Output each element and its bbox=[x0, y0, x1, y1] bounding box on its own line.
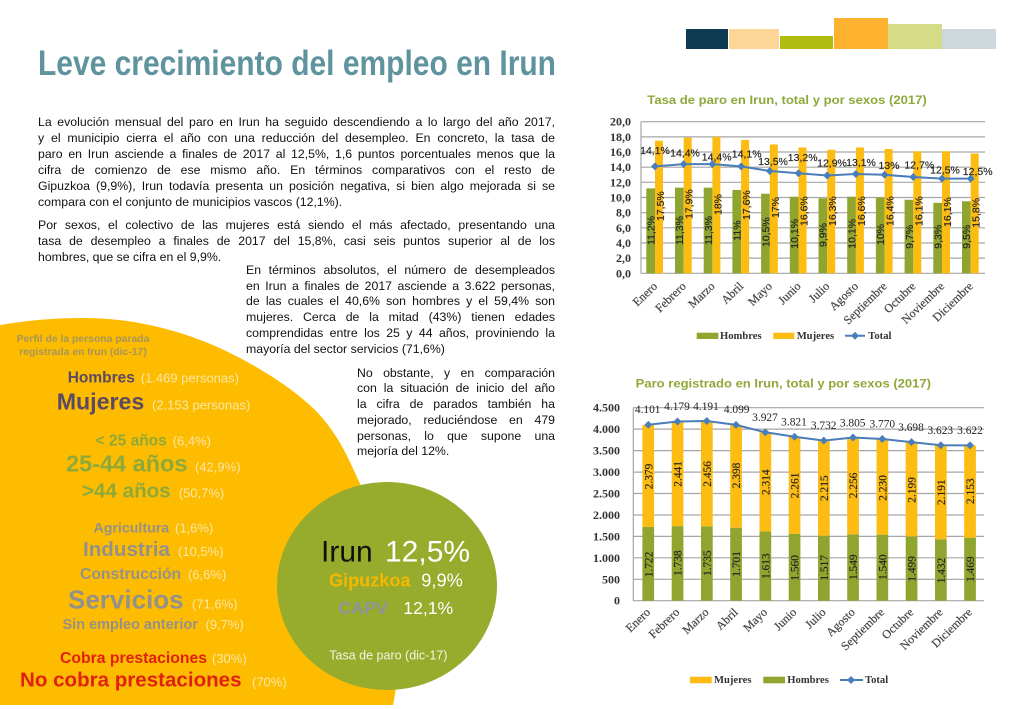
stacked bar chart: registered unemployment by sex: 2.153 bbox=[965, 478, 977, 504]
stacked bar chart: registered unemployment by sex: 3.821 bbox=[781, 417, 807, 429]
benefits breakdown bbox=[20, 650, 287, 692]
text block: compared to start of year: No obstante, y en comparación bbox=[357, 366, 555, 380]
stacked bar chart: registered unemployment by sex: Junio bbox=[771, 605, 799, 633]
stacked bar chart: registered unemployment by sex: Agosto bbox=[823, 605, 858, 639]
text block: monthly evolution: compara con el conjunto de municipios vascos (12,1%). bbox=[38, 195, 342, 209]
stacked bar chart: registered unemployment by sex: Marzo bbox=[679, 605, 712, 637]
bar chart: unemployment rate by sex bbox=[610, 115, 993, 342]
text block: monthly evolution bbox=[38, 115, 555, 209]
age breakdown: (6,4%) bbox=[173, 434, 211, 449]
bar chart: unemployment rate by sex: 13,5% bbox=[758, 156, 788, 168]
stacked bar chart: registered unemployment by sex: 4.179 bbox=[664, 401, 690, 413]
bar chart: unemployment rate by sex: 10,5% bbox=[760, 217, 772, 247]
stacked bar chart: registered unemployment by sex: 2.256 bbox=[848, 472, 860, 498]
stacked bar chart: registered unemployment by sex: 3.622 bbox=[957, 425, 983, 437]
legend: unemployment rate chart: Hombres bbox=[720, 331, 762, 342]
text block: monthly evolution: y el municipio cierra el año con una reducción del desempleo. En concreto, la tasa de bbox=[38, 131, 555, 145]
bar chart: unemployment rate by sex: 16,1% bbox=[942, 197, 954, 227]
sex breakdown: (2.153 personas) bbox=[152, 397, 250, 412]
bar chart: unemployment rate by sex: 12,9% bbox=[817, 158, 847, 170]
bar chart: unemployment rate by sex: 12,7% bbox=[904, 159, 934, 171]
stacked bar chart: registered unemployment by sex: 3.927 bbox=[752, 412, 778, 424]
bar chart: unemployment rate by sex: 10,1% bbox=[789, 219, 801, 249]
stacked bar chart: registered unemployment by sex: 4.101 bbox=[635, 404, 661, 416]
benefits breakdown: (70%) bbox=[252, 675, 287, 690]
bar chart: unemployment rate by sex: 14,4% bbox=[670, 148, 700, 160]
stacked bar chart: registered unemployment by sex: 2.261 bbox=[790, 472, 802, 498]
stacked bar chart: registered unemployment by sex: Abril bbox=[713, 605, 741, 633]
text block: absolute terms: de las cuales el 40,6% son hombres y el 59,4% son bbox=[246, 294, 555, 308]
legend: registered unemployment chart: Hombres bbox=[787, 675, 829, 686]
sector breakdown: (10,5%) bbox=[178, 544, 224, 559]
bar chart: unemployment rate by sex: 20,0 bbox=[610, 115, 631, 129]
bar chart: unemployment rate by sex: 18,0 bbox=[610, 130, 631, 144]
bar chart: unemployment rate by sex: 11,2% bbox=[646, 216, 658, 245]
sector breakdown: (6,6%) bbox=[188, 567, 226, 582]
stacked bar chart: registered unemployment by sex: 2.456 bbox=[702, 461, 714, 487]
sector breakdown: (9,7%) bbox=[206, 617, 244, 632]
bar chart: unemployment rate by sex: 9,9% bbox=[818, 223, 830, 247]
stacked bar chart: registered unemployment by sex: 2.314 bbox=[760, 469, 772, 495]
bar chart: unemployment rate by sex: 18% bbox=[712, 194, 724, 215]
age breakdown: >44 años bbox=[82, 480, 171, 503]
text block: absolute terms: en Irun a finales de 2017 asciende a 3.622 personas, bbox=[246, 279, 555, 293]
bar chart: unemployment rate by sex: 12,0 bbox=[610, 175, 631, 189]
legend: unemployment rate chart bbox=[697, 331, 892, 342]
text block: by sex: tasa de desempleo a finales de 2017 del 15,8%, casi seis puntos superior al de los bbox=[38, 234, 555, 248]
stacked bar chart: registered unemployment by sex: 3.732 bbox=[811, 420, 837, 432]
stacked bar chart: registered unemployment by sex: 3.623 bbox=[927, 425, 953, 437]
text block: absolute terms: mayoría del sector servicios (71,6%) bbox=[246, 342, 445, 356]
sector breakdown: Industria bbox=[83, 538, 171, 561]
bar chart: unemployment rate by sex: Febrero bbox=[652, 279, 689, 315]
bar chart: unemployment rate by sex: 12,5% bbox=[930, 164, 960, 176]
sector breakdown bbox=[62, 521, 244, 633]
benefits breakdown: Cobra prestaciones bbox=[60, 650, 207, 667]
sex breakdown: (1.469 personas) bbox=[141, 370, 239, 385]
bar chart: unemployment rate by sex: 17,5% bbox=[655, 191, 667, 221]
panel: unemployment rate circle: 12,5% bbox=[385, 536, 470, 569]
stacked bar chart: registered unemployment by sex: 1.469 bbox=[965, 556, 977, 582]
bar chart: unemployment rate by sex: 10,1% bbox=[846, 219, 858, 249]
sex breakdown: Hombres bbox=[68, 369, 135, 386]
stacked bar chart: registered unemployment by sex: Enero bbox=[623, 605, 653, 635]
bar chart: unemployment rate by sex: Noviembre bbox=[899, 279, 947, 327]
stacked bar chart: registered unemployment by sex: Mayo bbox=[740, 605, 770, 635]
bar chart: unemployment rate by sex: Marzo bbox=[685, 279, 717, 311]
legend: registered unemployment chart: Total bbox=[865, 675, 888, 686]
stacked bar chart: registered unemployment by sex: 1.540 bbox=[877, 554, 889, 580]
stacked bar chart: registered unemployment by sex: 3.698 bbox=[898, 422, 924, 434]
text block: compared to start of year: personas, lo que supone una bbox=[357, 429, 555, 443]
bar chart: unemployment rate by sex: 16,1% bbox=[913, 196, 925, 226]
stacked bar chart: registered unemployment by sex: Octubre bbox=[879, 605, 916, 642]
text block: compared to start of year bbox=[357, 366, 555, 458]
age breakdown: < 25 años bbox=[96, 433, 167, 450]
panel: unemployment rate circle bbox=[277, 482, 497, 690]
age breakdown: (50,7%) bbox=[179, 486, 224, 501]
sector breakdown: Construcción bbox=[80, 566, 181, 583]
bar chart: unemployment rate by sex: 16,6% bbox=[856, 196, 868, 226]
stacked bar chart: registered unemployment by sex: 1.432 bbox=[936, 557, 948, 583]
chart title: unemployment rate: Tasa de paro en Irun, total y por sexos (2017) bbox=[647, 93, 927, 107]
bar chart: unemployment rate by sex: Diciembre bbox=[930, 279, 976, 324]
text block: compared to start of year: mejorado, reduciéndose en 479 bbox=[357, 413, 555, 427]
stacked bar chart: registered unemployment by sex: 1.499 bbox=[906, 556, 918, 582]
stacked bar chart: registered unemployment by sex: Diciembre bbox=[929, 605, 975, 650]
sector breakdown: Agricultura bbox=[94, 521, 169, 537]
stacked bar chart: registered unemployment by sex: 3.500 bbox=[593, 444, 620, 458]
bar chart: unemployment rate by sex: 9,3% bbox=[932, 225, 944, 249]
stacked bar chart: registered unemployment by sex: 4.099 bbox=[724, 404, 750, 416]
legend: unemployment rate chart: Total bbox=[868, 331, 892, 342]
bar chart: unemployment rate by sex: Agosto bbox=[826, 279, 861, 313]
sector breakdown: Sin empleo anterior bbox=[62, 617, 198, 633]
stacked bar chart: registered unemployment by sex: 1.722 bbox=[643, 551, 655, 577]
stacked bar chart: registered unemployment by sex: 2.500 bbox=[593, 486, 620, 500]
stacked bar chart: registered unemployment by sex: 0 bbox=[614, 594, 620, 608]
stacked bar chart: registered unemployment by sex: 500 bbox=[602, 572, 620, 586]
chart title: registered unemployment: Paro registrado en Irun, total y por sexos (2017) bbox=[636, 376, 931, 390]
stacked bar chart: registered unemployment by sex: 2.398 bbox=[731, 462, 743, 488]
stacked bar chart: registered unemployment by sex: 4.500 bbox=[593, 401, 620, 415]
profile heading: Perfil de la persona parada bbox=[17, 334, 149, 345]
bar chart: unemployment rate by sex: 17% bbox=[770, 197, 782, 218]
text block: absolute terms: En términos absolutos, el número de desempleados bbox=[246, 263, 555, 277]
bar chart: unemployment rate by sex: Octubre bbox=[881, 279, 918, 316]
legend: unemployment rate chart: Mujeres bbox=[797, 331, 834, 342]
panel: unemployment rate circle: 12,1% bbox=[403, 598, 454, 618]
bar chart: unemployment rate by sex: 12,5% bbox=[963, 166, 993, 178]
stacked bar chart: registered unemployment by sex: 3.000 bbox=[593, 465, 620, 479]
bar chart: unemployment rate by sex: 2,0 bbox=[616, 251, 631, 265]
stacked bar chart: registered unemployment by sex: 1.500 bbox=[593, 529, 620, 543]
text block: monthly evolution: Gipuzkoa (9,9%), Irun todavía presenta un posición negativa, si bien algo mejorada si se bbox=[38, 179, 555, 193]
bar chart: unemployment rate by sex: 6,0 bbox=[616, 221, 631, 235]
bar chart: unemployment rate by sex: 10,0 bbox=[610, 190, 631, 204]
bar chart: unemployment rate by sex: 17,9% bbox=[684, 189, 696, 219]
stacked bar chart: registered unemployment by sex: 2.379 bbox=[643, 463, 655, 489]
text block: monthly evolution: paro en Irun asciende a finales de 2017 al 12,5%, 1,6 puntos porcentuales menos que la bbox=[38, 147, 555, 161]
sex breakdown: Mujeres bbox=[57, 388, 144, 414]
bar chart: unemployment rate by sex: 9,5% bbox=[961, 225, 973, 249]
text block: absolute terms: mujeres. Cerca de la mitad (43%) tienen edades bbox=[246, 310, 555, 324]
bar chart: unemployment rate by sex: 11% bbox=[732, 220, 744, 241]
panel: unemployment rate circle: Tasa de paro (dic-17) bbox=[329, 648, 447, 662]
panel: yellow profile shape bbox=[0, 318, 400, 705]
text block: compared to start of year: mejoría del 12%. bbox=[357, 444, 449, 458]
bar chart: unemployment rate by sex: 14,0 bbox=[610, 160, 631, 174]
text block: absolute terms: comprendidas entre los 25 y 44 años, proviniendo la bbox=[246, 326, 555, 340]
stacked bar chart: registered unemployment by sex: 1.738 bbox=[672, 550, 684, 576]
title: Leve crecimiento del empleo en Irun bbox=[38, 44, 556, 83]
stacked bar chart: registered unemployment by sex: 1.560 bbox=[790, 555, 802, 581]
stacked bar chart: registered unemployment by sex: 2.441 bbox=[672, 461, 684, 487]
decorative colour blocks bbox=[686, 18, 996, 49]
bar chart: unemployment rate by sex: Mayo bbox=[745, 279, 775, 309]
bar chart: unemployment rate by sex: 10% bbox=[875, 224, 887, 245]
stacked bar chart: registered unemployment by sex: 4.191 bbox=[693, 401, 719, 413]
bar chart: unemployment rate by sex: Junio bbox=[775, 279, 804, 307]
text block: monthly evolution: cifra de comienzo de ese mismo año. En términos comparativos con el resto de bbox=[38, 163, 555, 177]
age breakdown bbox=[66, 433, 241, 503]
bar chart: unemployment rate by sex: 17,6% bbox=[741, 190, 753, 220]
sector breakdown: (71,6%) bbox=[192, 596, 238, 611]
stacked bar chart: registered unemployment by sex: Julio bbox=[802, 605, 829, 631]
text block: compared to start of year: con la situación de inicio del año bbox=[357, 381, 555, 395]
stacked bar chart: registered unemployment by sex: 1.000 bbox=[593, 551, 620, 565]
bar chart: unemployment rate by sex: 11,3% bbox=[703, 216, 715, 245]
bar chart: unemployment rate by sex: 14,4% bbox=[702, 152, 732, 164]
bar chart: unemployment rate by sex: 9,7% bbox=[904, 225, 916, 249]
panel: profile of the registered unemployed bbox=[17, 334, 287, 692]
bar chart: unemployment rate by sex: 16,0 bbox=[610, 145, 631, 159]
bar chart: unemployment rate by sex: 0,0 bbox=[616, 266, 631, 280]
bar chart: unemployment rate by sex: Enero bbox=[630, 279, 660, 309]
profile heading: registrada en Irun (dic-17) bbox=[19, 347, 147, 358]
stacked bar chart: registered unemployment by sex: 2.000 bbox=[593, 508, 620, 522]
bar chart: unemployment rate by sex: 13% bbox=[878, 160, 900, 172]
bar chart: unemployment rate by sex: 16,6% bbox=[798, 196, 810, 226]
stacked bar chart: registered unemployment by sex: 1.549 bbox=[848, 554, 860, 580]
text block: by sex bbox=[38, 218, 555, 264]
bar chart: unemployment rate by sex: 15,8% bbox=[971, 198, 983, 228]
sector breakdown: Servicios bbox=[68, 584, 184, 614]
stacked bar chart: registered unemployment by sex: 3.805 bbox=[840, 417, 866, 429]
stacked bar chart: registered unemployment by sex: Septiembre bbox=[838, 605, 887, 653]
stacked bar chart: registered unemployment by sex: 4.000 bbox=[593, 422, 620, 436]
stacked bar chart: registered unemployment by sex: 3.770 bbox=[869, 418, 895, 430]
bar chart: unemployment rate by sex: Abril bbox=[718, 279, 747, 307]
sex breakdown bbox=[57, 369, 250, 414]
stacked bar chart: registered unemployment by sex: 1.701 bbox=[731, 551, 743, 577]
bar chart: unemployment rate by sex: 14,1% bbox=[640, 145, 670, 157]
stacked bar chart: registered unemployment by sex: 2.230 bbox=[877, 475, 889, 501]
stacked bar chart: registered unemployment by sex: 2.191 bbox=[936, 479, 948, 505]
panel: unemployment rate circle: 9,9% bbox=[421, 571, 463, 591]
bar chart: unemployment rate by sex: 14,1% bbox=[732, 148, 762, 160]
text block: monthly evolution: La evolución mensual del paro en Irun ha seguido descendiendo a lo largo del año 2017, bbox=[38, 115, 555, 129]
panel: unemployment rate circle: Irun bbox=[321, 536, 373, 569]
text block: absolute terms bbox=[246, 263, 555, 356]
bar chart: unemployment rate by sex: 11,3% bbox=[674, 216, 686, 245]
bar chart: unemployment rate by sex: 16,3% bbox=[827, 196, 839, 226]
age breakdown: 25-44 años bbox=[66, 451, 187, 477]
text block: by sex: Por sexos, el colectivo de las mujeres está siendo el más afectado, presentando una bbox=[38, 218, 555, 232]
legend: registered unemployment chart bbox=[690, 675, 888, 686]
stacked bar chart: registered unemployment by sex: 1.613 bbox=[760, 553, 772, 579]
bar chart: unemployment rate by sex: 16,4% bbox=[885, 196, 897, 226]
stacked bar chart: registered unemployment by sex: Febrero bbox=[646, 605, 682, 641]
age breakdown: (42,9%) bbox=[195, 460, 241, 475]
stacked bar chart: registered unemployment by sex bbox=[593, 401, 984, 686]
sector breakdown: (1,6%) bbox=[175, 521, 213, 536]
bar chart: unemployment rate by sex: 13,2% bbox=[788, 152, 818, 164]
bar chart: unemployment rate by sex: Septiembre bbox=[841, 279, 890, 327]
panel: unemployment rate circle: CAPV bbox=[338, 598, 388, 618]
benefits breakdown: (30%) bbox=[212, 651, 247, 666]
bar chart: unemployment rate by sex: Julio bbox=[806, 279, 832, 305]
legend: registered unemployment chart: Mujeres bbox=[714, 675, 751, 686]
panel: unemployment rate circle: Gipuzkoa bbox=[329, 571, 411, 591]
stacked bar chart: registered unemployment by sex: 1.517 bbox=[819, 555, 831, 581]
stacked bar chart: registered unemployment by sex: 1.735 bbox=[702, 550, 714, 576]
benefits breakdown: No cobra prestaciones bbox=[20, 669, 242, 692]
bar chart: unemployment rate by sex: 8,0 bbox=[616, 206, 631, 220]
text block: by sex: hombres, que se cifra en el 9,9%. bbox=[38, 250, 221, 264]
stacked bar chart: registered unemployment by sex: 2.199 bbox=[906, 477, 918, 503]
bar chart: unemployment rate by sex: 4,0 bbox=[616, 236, 631, 250]
stacked bar chart: registered unemployment by sex: 2.215 bbox=[819, 475, 831, 501]
text block: compared to start of year: la cifra de parados también ha bbox=[357, 397, 555, 411]
bar chart: unemployment rate by sex: 13,1% bbox=[846, 157, 876, 169]
stacked bar chart: registered unemployment by sex: Noviembre bbox=[897, 605, 946, 653]
